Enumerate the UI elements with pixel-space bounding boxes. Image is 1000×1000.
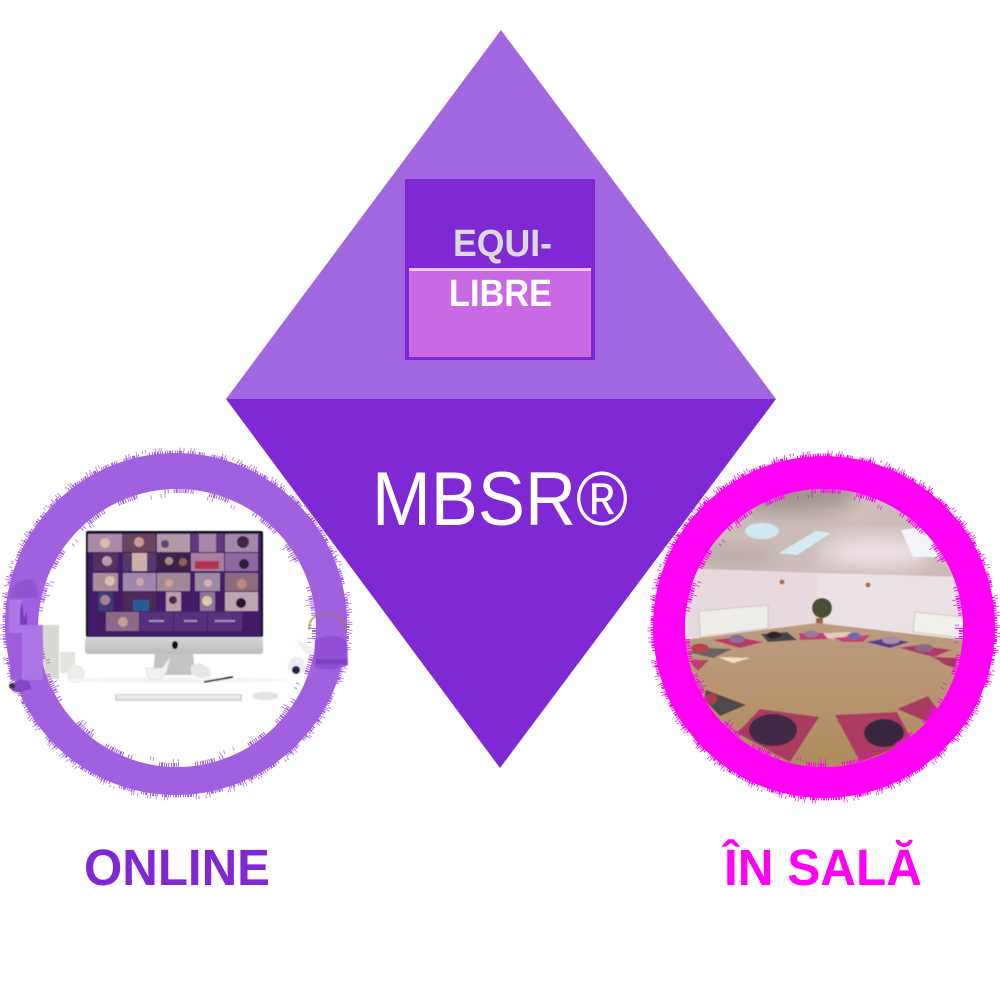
photo ring: online xyxy=(1,449,351,799)
photo ring: in sala xyxy=(649,452,999,802)
heading: MBSR: MBSR® xyxy=(372,457,628,542)
lower half xyxy=(409,271,591,357)
ceiling xyxy=(698,489,954,577)
radiators xyxy=(699,605,768,637)
photo: desk with video call on monitor xyxy=(38,489,316,767)
diamond: lower triangle xyxy=(226,399,776,768)
photo: meditation room xyxy=(685,489,963,767)
caption: online: ONLINE xyxy=(84,839,270,896)
equilibre box xyxy=(405,179,595,360)
box frame xyxy=(405,179,595,360)
video call tiles xyxy=(88,534,258,631)
floor xyxy=(684,623,964,770)
outer and inner fringe: in sala xyxy=(649,452,999,802)
label: LIBRE: LIBRE xyxy=(449,273,552,315)
upper half xyxy=(409,183,591,268)
diamond: upper triangle xyxy=(226,30,776,399)
outer and inner fringe: online xyxy=(1,449,351,799)
label: EQUI-: EQUI- xyxy=(453,223,552,265)
caption: in sala: ÎN SALĂ xyxy=(721,838,922,896)
plant xyxy=(812,598,832,626)
monitor xyxy=(85,531,263,675)
objects showing through the ring xyxy=(9,579,348,692)
walls xyxy=(684,568,817,640)
mats and cushions xyxy=(687,630,957,762)
divider xyxy=(409,268,591,271)
ring disc: online xyxy=(5,453,347,795)
desk objects xyxy=(115,657,306,701)
ring disc: in sala xyxy=(653,456,995,798)
